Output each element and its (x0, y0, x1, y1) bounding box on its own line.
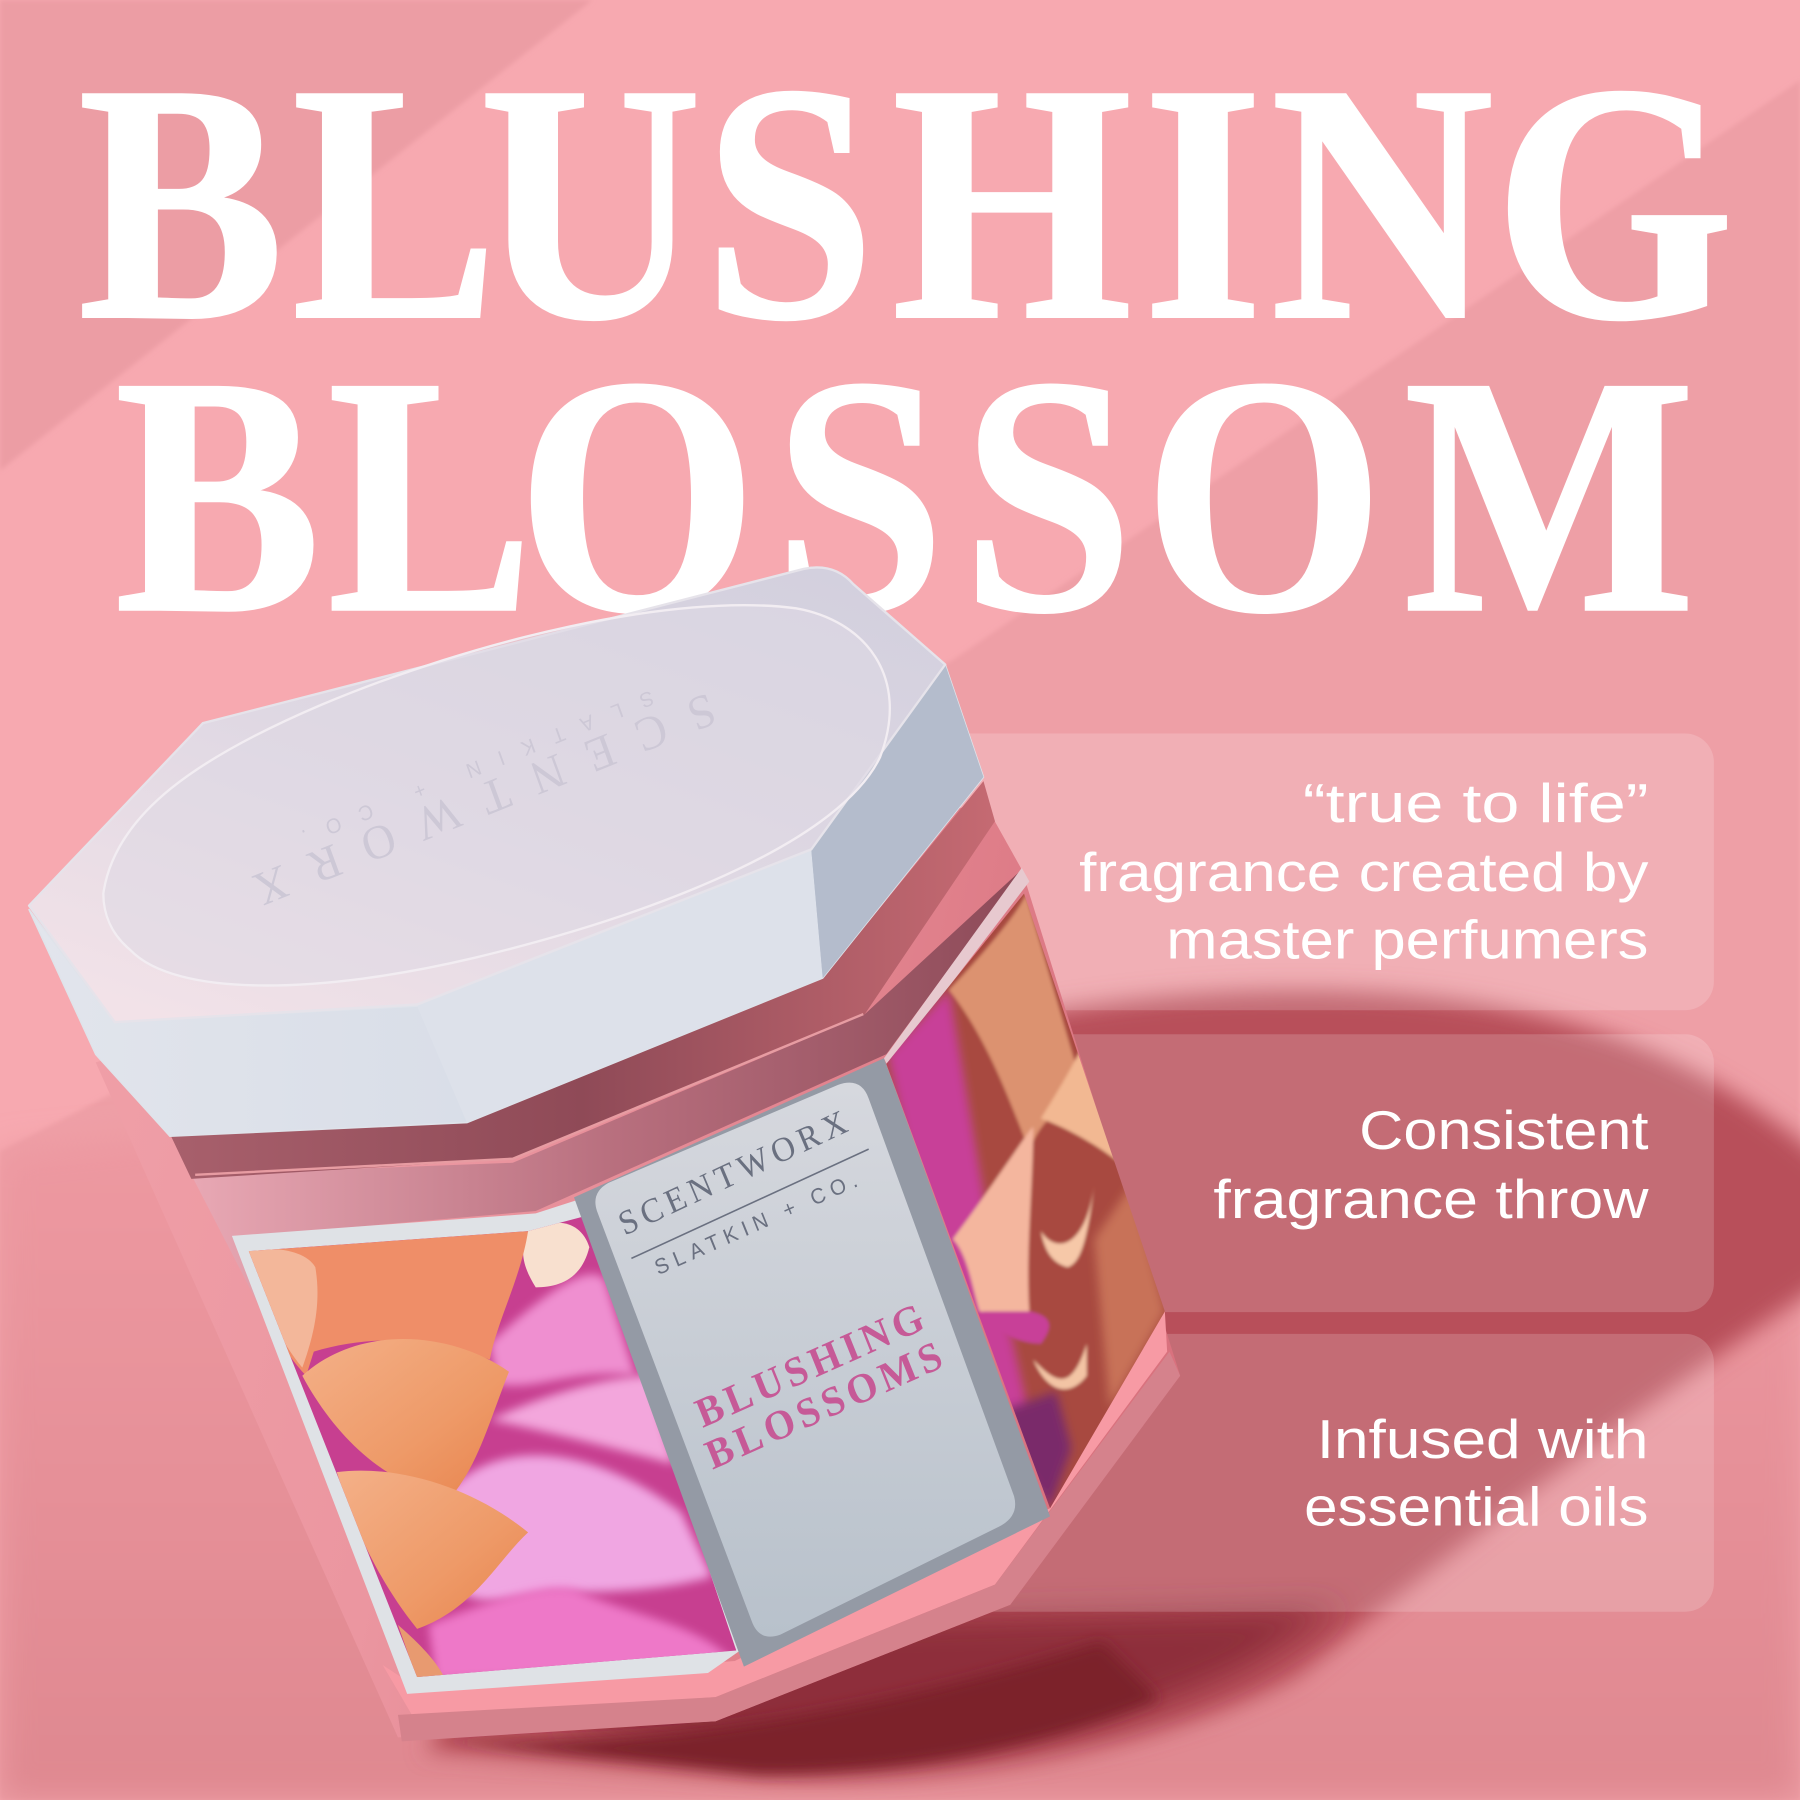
title line 2: BLOSSOM (115, 308, 1695, 684)
text: consistent throw: fragrance throw (1213, 1168, 1649, 1230)
central label silver frame (574, 1058, 1050, 1667)
embossed subline: SLATKIN + CO. (299, 685, 656, 848)
lid embossed oval (103, 605, 890, 985)
text: true to life: “true to life” (1303, 772, 1648, 834)
text: true to life: master perfumers (1166, 909, 1648, 971)
candle jar (29, 567, 1186, 1741)
left floral art (248, 1217, 736, 1677)
title line 1: BLUSHING (78, 16, 1734, 391)
embossed name: SCENTWORX (247, 682, 722, 916)
text: essential oils: Infused with (1317, 1408, 1648, 1470)
lid edge shading right (811, 665, 983, 978)
label product name (689, 1294, 948, 1478)
jar shoulder (191, 869, 1022, 1368)
lid edge shading (417, 849, 823, 1123)
brand subline: SLATKIN + CO. (651, 1169, 861, 1280)
panel: true to life (941, 734, 1714, 1010)
left label silver frame (232, 1195, 742, 1694)
lid side (29, 665, 983, 1136)
text: true to life: fragrance created by (1079, 841, 1649, 903)
right floral art (886, 894, 1165, 1508)
lid top (29, 567, 945, 1022)
product name line 2: BLOSSOMS (699, 1332, 948, 1478)
glass body (96, 801, 1180, 1737)
wax base (383, 1311, 1167, 1717)
jar neck (168, 781, 995, 1179)
jar shadow (425, 990, 1800, 1778)
brand name: SCENTWORX (613, 1104, 853, 1243)
brand divider (631, 1149, 869, 1258)
text: consistent throw: Consistent (1359, 1099, 1648, 1161)
lid embossed brand (247, 682, 722, 916)
central white label (595, 1083, 1015, 1637)
product name line 1: BLUSHING (689, 1294, 930, 1436)
label wordmark (613, 1104, 869, 1280)
neck highlight (195, 1014, 863, 1175)
panel: essential oils (941, 1334, 1714, 1612)
text: essential oils: essential oils (1304, 1476, 1648, 1538)
title (78, 16, 1734, 684)
panel: consistent throw (987, 1034, 1714, 1312)
right label silver edge (884, 868, 1029, 1066)
glass base edge (398, 1352, 1180, 1741)
